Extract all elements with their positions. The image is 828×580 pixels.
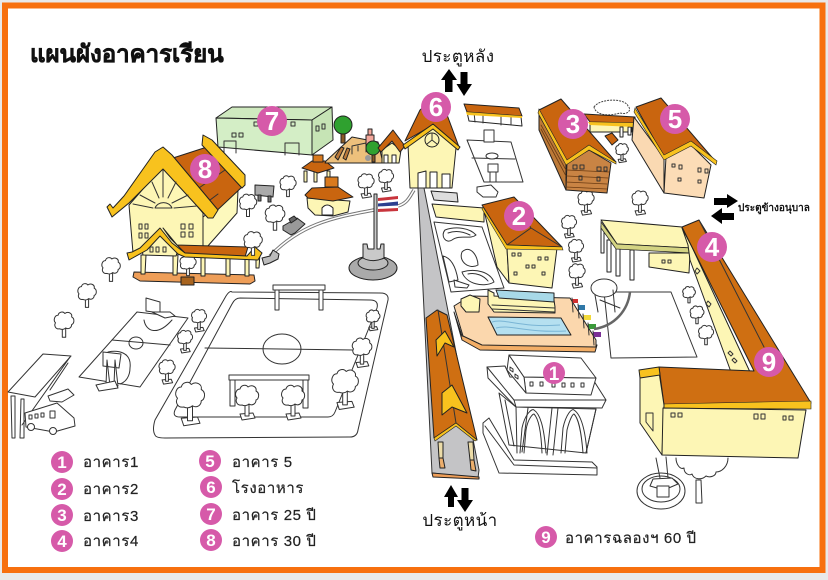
numbered marker 3: 3 [566,109,580,139]
legend: building 4 [51,530,139,552]
building 5 [632,98,717,198]
monument and tree below building 9 [637,457,728,509]
legend: 25 year building: 7 [206,505,216,524]
numbered marker 8 [190,154,220,184]
legend: building 5: อาคาร 5 [232,454,293,471]
building 7 [216,107,333,155]
small sign and bench [255,185,305,235]
numbered marker 5: 5 [668,104,682,134]
court side trees [159,309,207,384]
building 9 lower block [639,367,806,458]
legend: 60 year building: อาคารฉลองฯ 60 ปี [565,530,697,547]
central road [418,188,479,478]
legend: 30 year building: อาคาร 30 ปี [232,533,316,550]
front gate label: ประตูหน้า [422,511,498,531]
front gate arrows [444,485,473,512]
building 8 veranda [127,228,262,285]
basketball court [79,298,188,391]
legend: 30 year building [200,529,316,551]
numbered marker 2: 2 [512,201,526,231]
building 8 [107,135,245,253]
back gate arrows [441,69,472,96]
numbered marker 5 [660,104,690,134]
legend: building 3 [51,504,139,526]
legend: building 2 [51,478,139,500]
legend: canteen [200,476,304,498]
long covered walkway [426,310,479,479]
legend: building 3: 3 [57,506,67,525]
building 4 and 9 long wing [659,220,811,409]
legend: building 1: อาคาร1 [83,454,139,471]
walkway to flagpole [262,190,414,265]
kiosk 1 [302,155,334,182]
building 2 [482,197,563,288]
building 3 and walkway [538,99,635,193]
numbered marker 1: 1 [549,364,560,385]
legend: building 1 [51,451,139,473]
pool deck [454,290,597,352]
back gate label: ประตูหลัง [422,47,494,67]
legend: 25 year building: อาคาร 25 ปี [232,507,316,524]
numbered marker 9 [754,347,784,377]
legend: building 2: 2 [57,480,67,499]
numbered marker 9: 9 [762,347,776,377]
playground [325,116,405,163]
numbered marker 4: 4 [705,232,720,262]
roof walkway behind building 6 [464,104,522,126]
trees near building 8 [54,169,394,337]
numbered marker 7: 7 [265,106,279,136]
outdoor court [467,130,523,197]
lawn and path by building 4 [591,279,714,358]
numbered marker 6: 6 [429,92,443,122]
legend: building 2: อาคาร2 [83,481,139,498]
building 6 [403,100,460,188]
numbered marker 7 [257,106,287,136]
field trees [176,310,380,426]
walkway trees right of garden [562,144,648,288]
football field [154,285,388,438]
numbered marker 6 [421,92,451,122]
numbered marker 4 [697,232,727,262]
numbered marker 2 [504,201,534,231]
legend: building 4: อาคาร4 [83,533,139,550]
legend: 25 year building [200,503,316,525]
numbered marker 1 [543,362,565,385]
bus shelter and bus [8,354,75,438]
flagpole [349,194,398,280]
building 2 garden [432,204,504,292]
kiosk 2 [305,177,353,216]
flags [572,298,601,345]
legend: canteen: โรงอาหาร [232,479,304,497]
numbered marker 8: 8 [198,154,212,184]
paving patch [431,191,458,202]
numbered marker 3 [558,109,588,139]
legend: building 4: 4 [57,532,67,551]
legend: canteen: 6 [206,478,216,497]
side gate label: ประตูข้างอนุบาล [738,202,810,215]
legend: 60 year building: 9 [541,528,551,547]
building 1 [483,355,606,475]
legend: building 5 [199,450,293,472]
title: แผนผังอาคารเรียน [30,41,224,68]
building 4 carport [601,220,691,280]
side gate arrows [711,194,738,224]
legend: building 5: 5 [205,452,215,471]
legend: 30 year building: 8 [206,531,216,550]
legend: 60 year building [535,526,697,548]
legend: building 1: 1 [57,453,67,472]
legend: building 3: อาคาร3 [83,508,139,525]
